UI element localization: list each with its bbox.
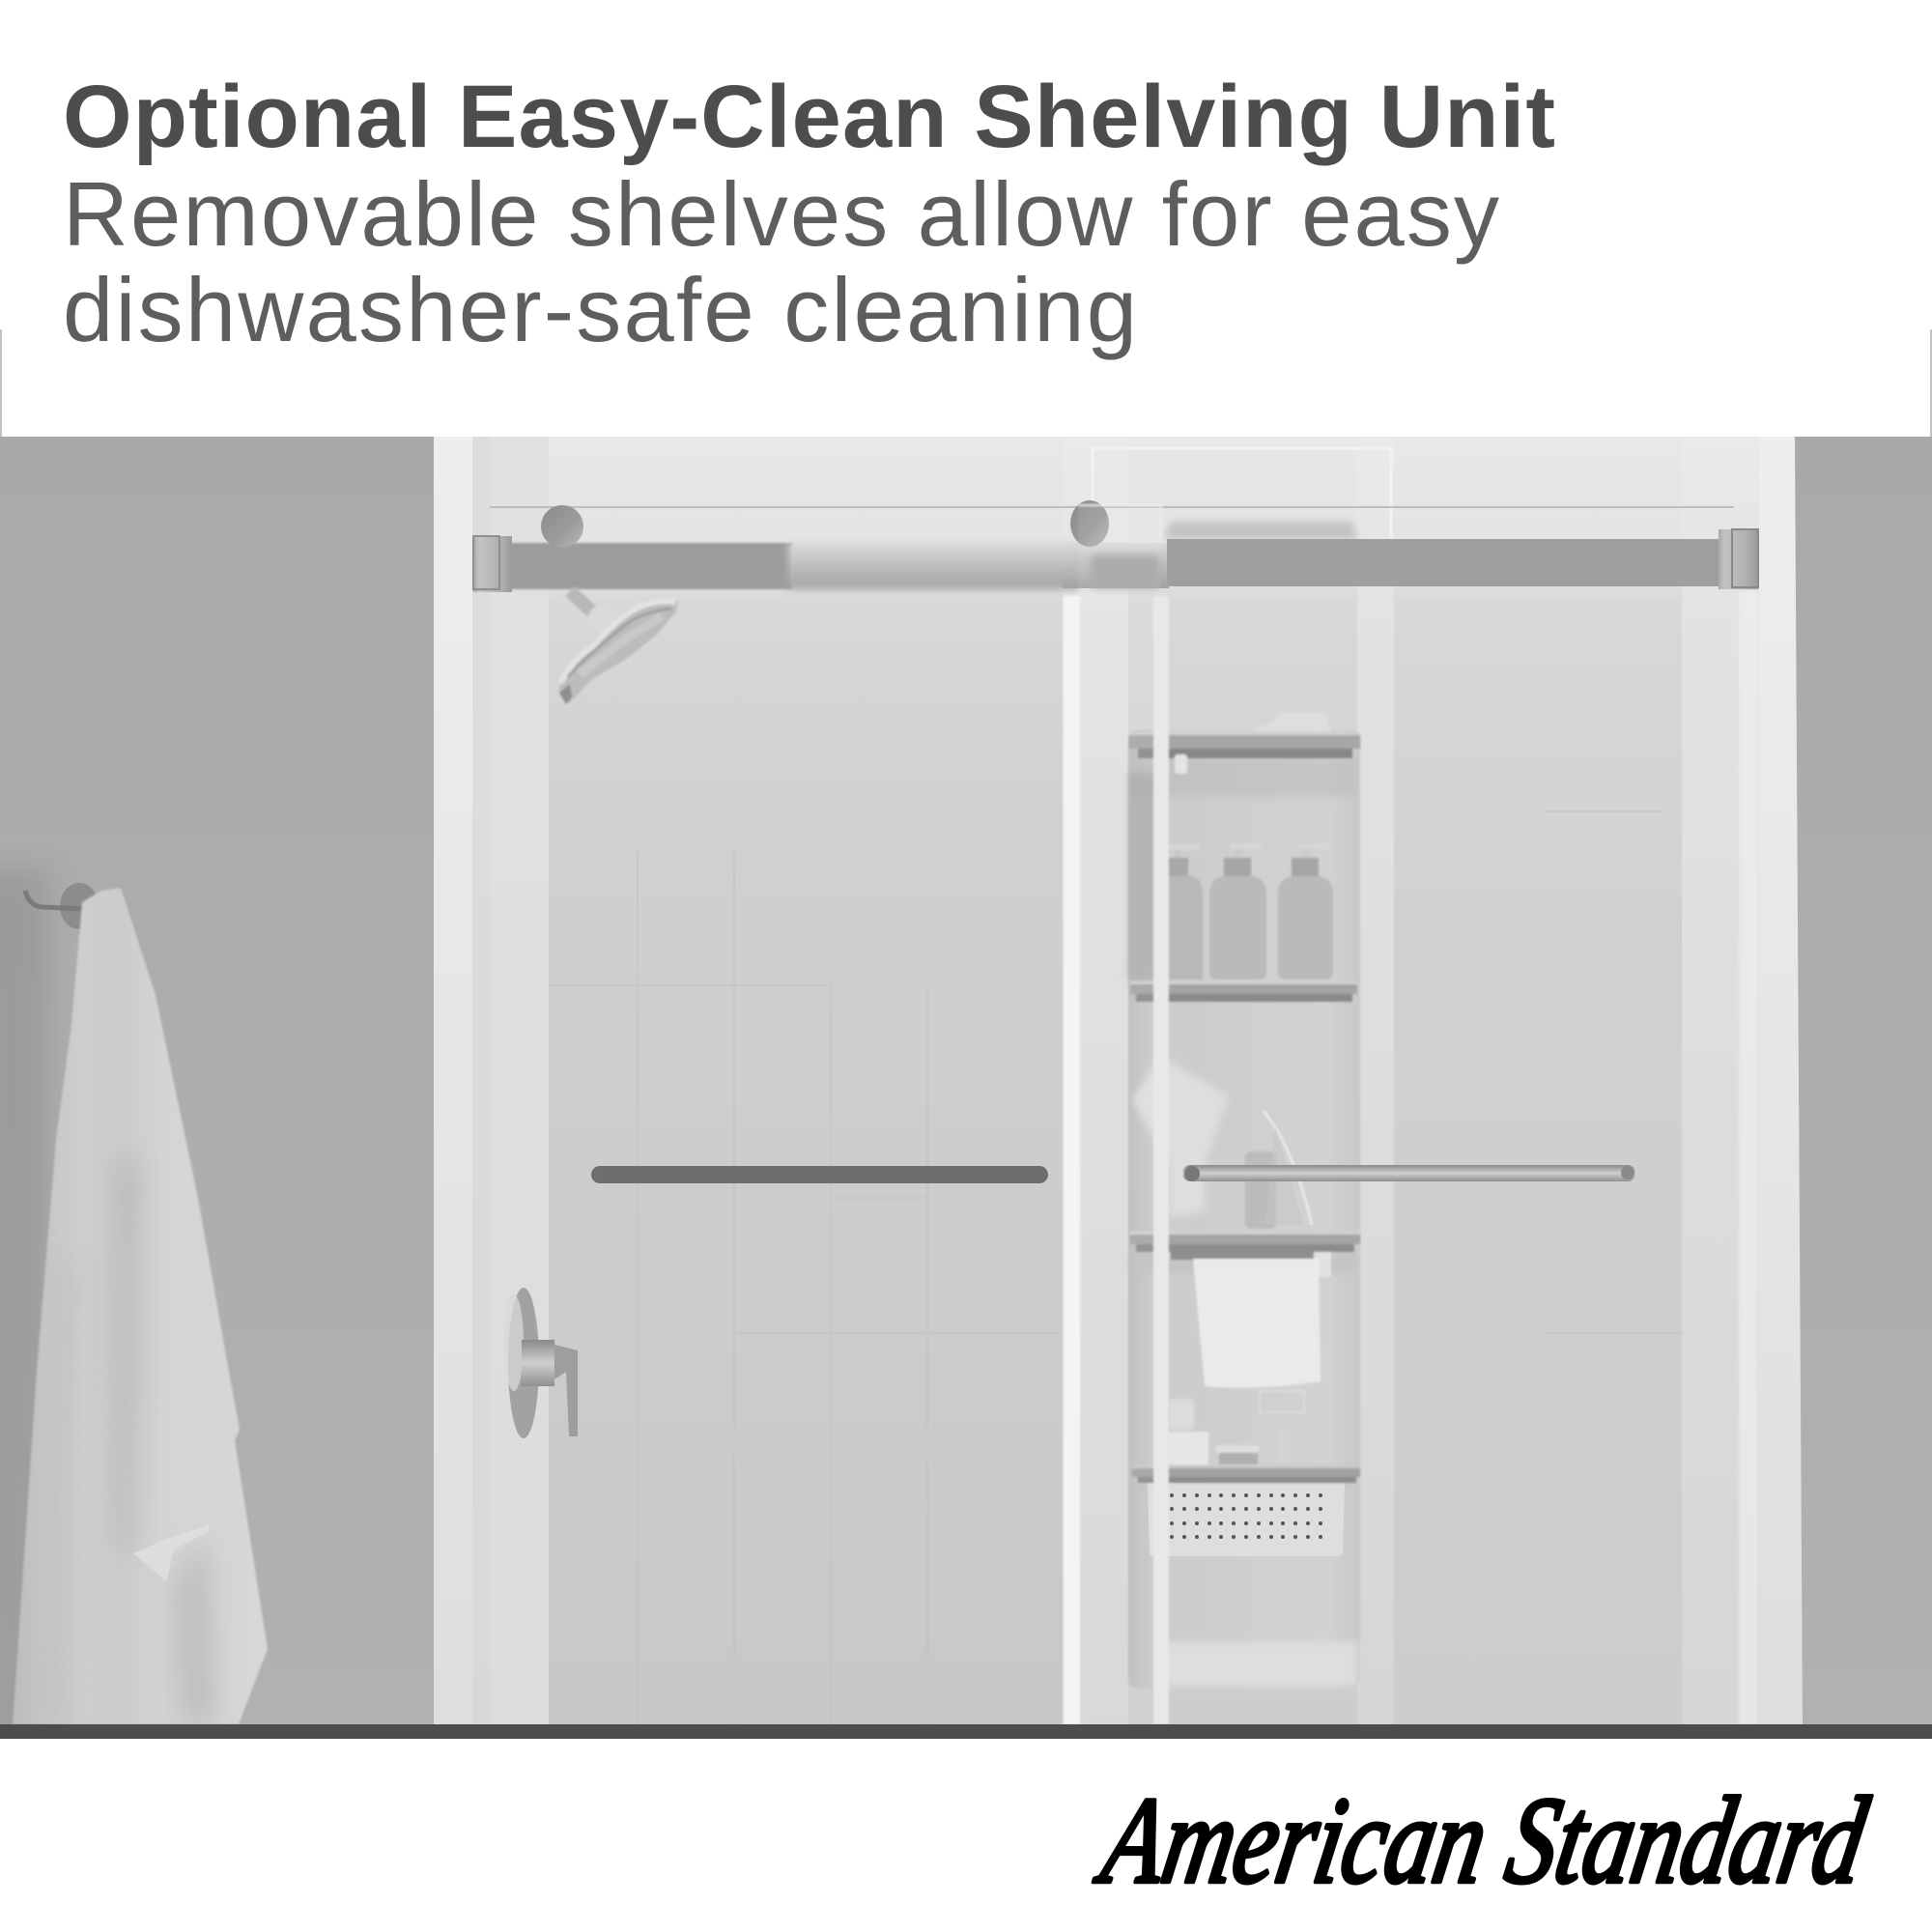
- header rail: [490, 507, 1734, 589]
- wall panels: [549, 437, 1759, 1724]
- wall: left: [0, 437, 434, 1797]
- door handle bar: right: [1182, 1165, 1635, 1181]
- door handle bar: left: [591, 1166, 1048, 1183]
- subtitle: dishwasher-safe cleaning: [63, 259, 1137, 360]
- glass door strips: [1064, 505, 1758, 1724]
- bottom bar: [0, 1724, 1932, 1739]
- hanging towel: [13, 888, 268, 1724]
- hook: [25, 883, 99, 929]
- towel flap hem: [133, 1524, 210, 1581]
- shower head: [559, 591, 678, 704]
- jar and squeegee: [1245, 1111, 1312, 1229]
- basket: [1148, 1483, 1345, 1556]
- shower surround frame: [434, 437, 1803, 1724]
- title: Optional Easy-Clean Shelving Unit: [63, 68, 1555, 166]
- header edge lines: [0, 329, 1932, 437]
- wall: right: [1787, 437, 1932, 1724]
- shelves: [1129, 732, 1360, 1483]
- rail brackets: [473, 529, 1758, 592]
- towel folds: [113, 1165, 220, 1723]
- photo: shower scene: [0, 437, 1932, 1797]
- small items on lowest shelf: [1169, 1391, 1262, 1465]
- rollers: [541, 500, 1109, 548]
- bottles on shelf: [1168, 856, 1333, 980]
- subtitle: [63, 163, 1499, 360]
- shelving niche: [1128, 713, 1360, 1689]
- loofah: [1132, 1056, 1229, 1218]
- folded hand towel: [1193, 1259, 1321, 1388]
- brush on top shelf: [1256, 715, 1329, 730]
- faucet control: [504, 1288, 578, 1438]
- subtitle: Removable shelves allow for easy: [63, 163, 1499, 265]
